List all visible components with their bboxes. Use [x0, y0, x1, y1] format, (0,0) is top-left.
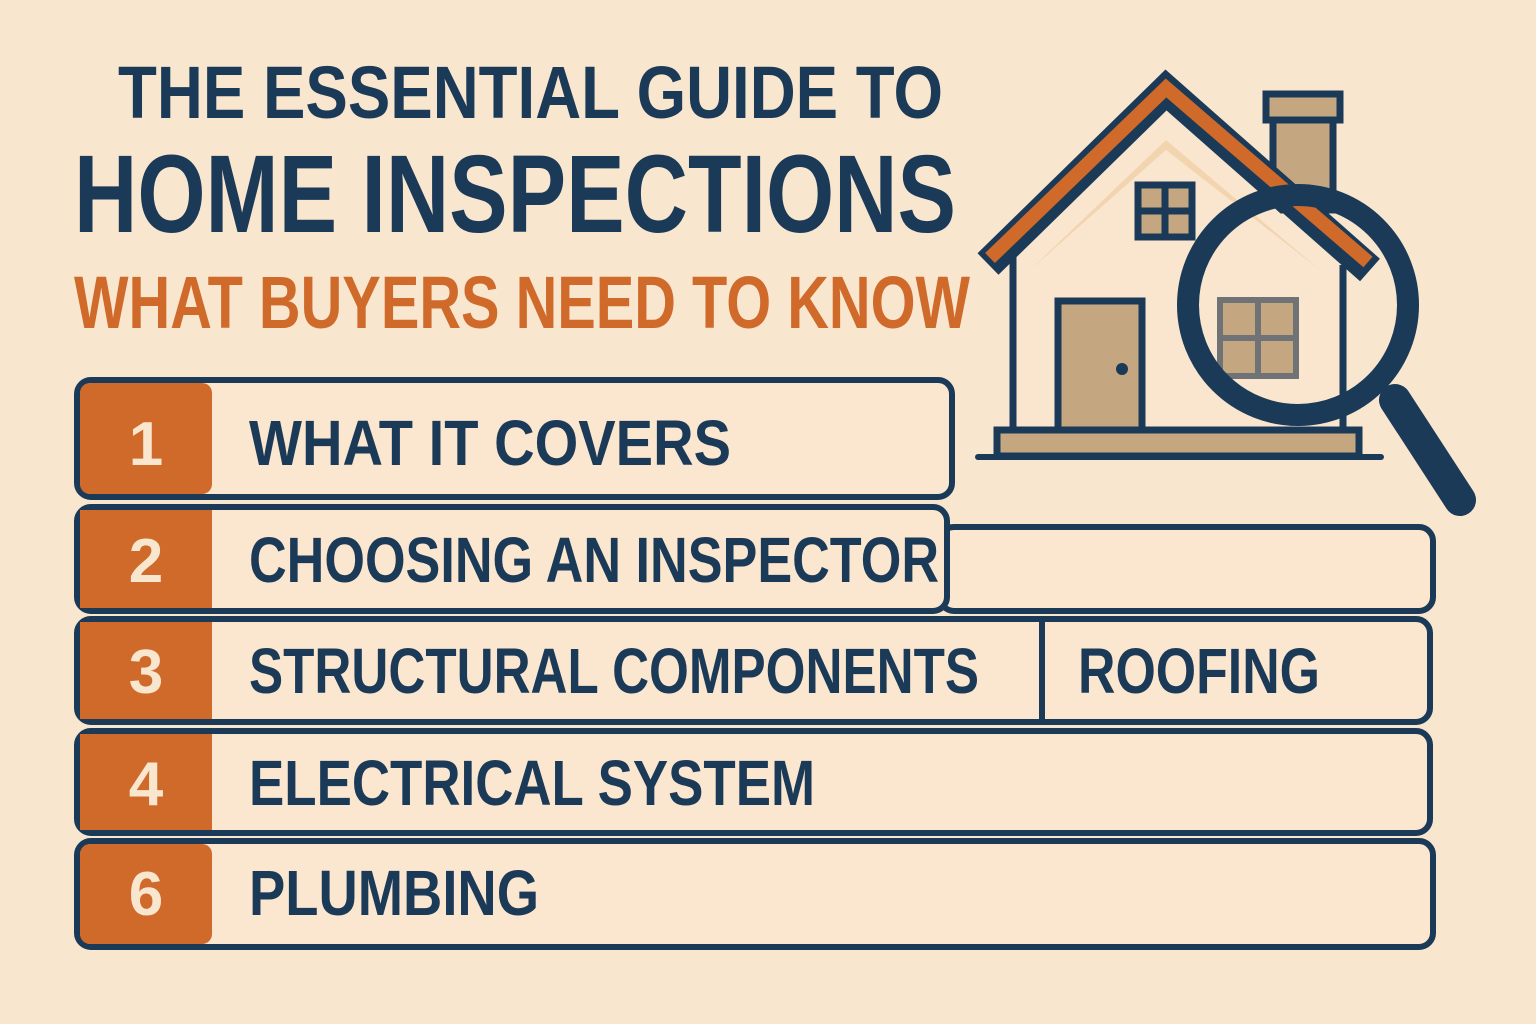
row labels: [249, 407, 1320, 929]
row 2 extension box: [940, 527, 1433, 611]
title: [74, 51, 970, 344]
list panel: [77, 380, 1433, 947]
row 4: [77, 731, 1430, 833]
row numbers: 1: [129, 410, 163, 479]
row labels: ELECTRICAL SYSTEM: [249, 747, 815, 819]
row labels: CHOOSING AN INSPECTOR: [249, 524, 939, 596]
row numbers: [129, 410, 164, 929]
icon: house with magnifier: [978, 88, 1460, 500]
row 3: [77, 619, 1430, 722]
row numbers: 2: [129, 527, 163, 596]
row 1: [77, 380, 952, 497]
row numbers: 6: [129, 860, 163, 929]
row labels: ROOFING: [1078, 635, 1320, 707]
title: WHAT BUYERS NEED TO KNOW: [74, 261, 970, 344]
row numbers: 3: [129, 638, 163, 707]
row labels: STRUCTURAL COMPONENTS: [249, 635, 979, 707]
row labels: PLUMBING: [249, 857, 539, 929]
row labels: WHAT IT COVERS: [249, 407, 731, 479]
title: HOME INSPECTIONS: [74, 133, 956, 256]
row numbers: 4: [129, 750, 164, 819]
row 2: [77, 507, 947, 611]
number cells: [80, 383, 212, 944]
row 6: [77, 841, 1433, 947]
title: THE ESSENTIAL GUIDE TO: [118, 51, 943, 134]
